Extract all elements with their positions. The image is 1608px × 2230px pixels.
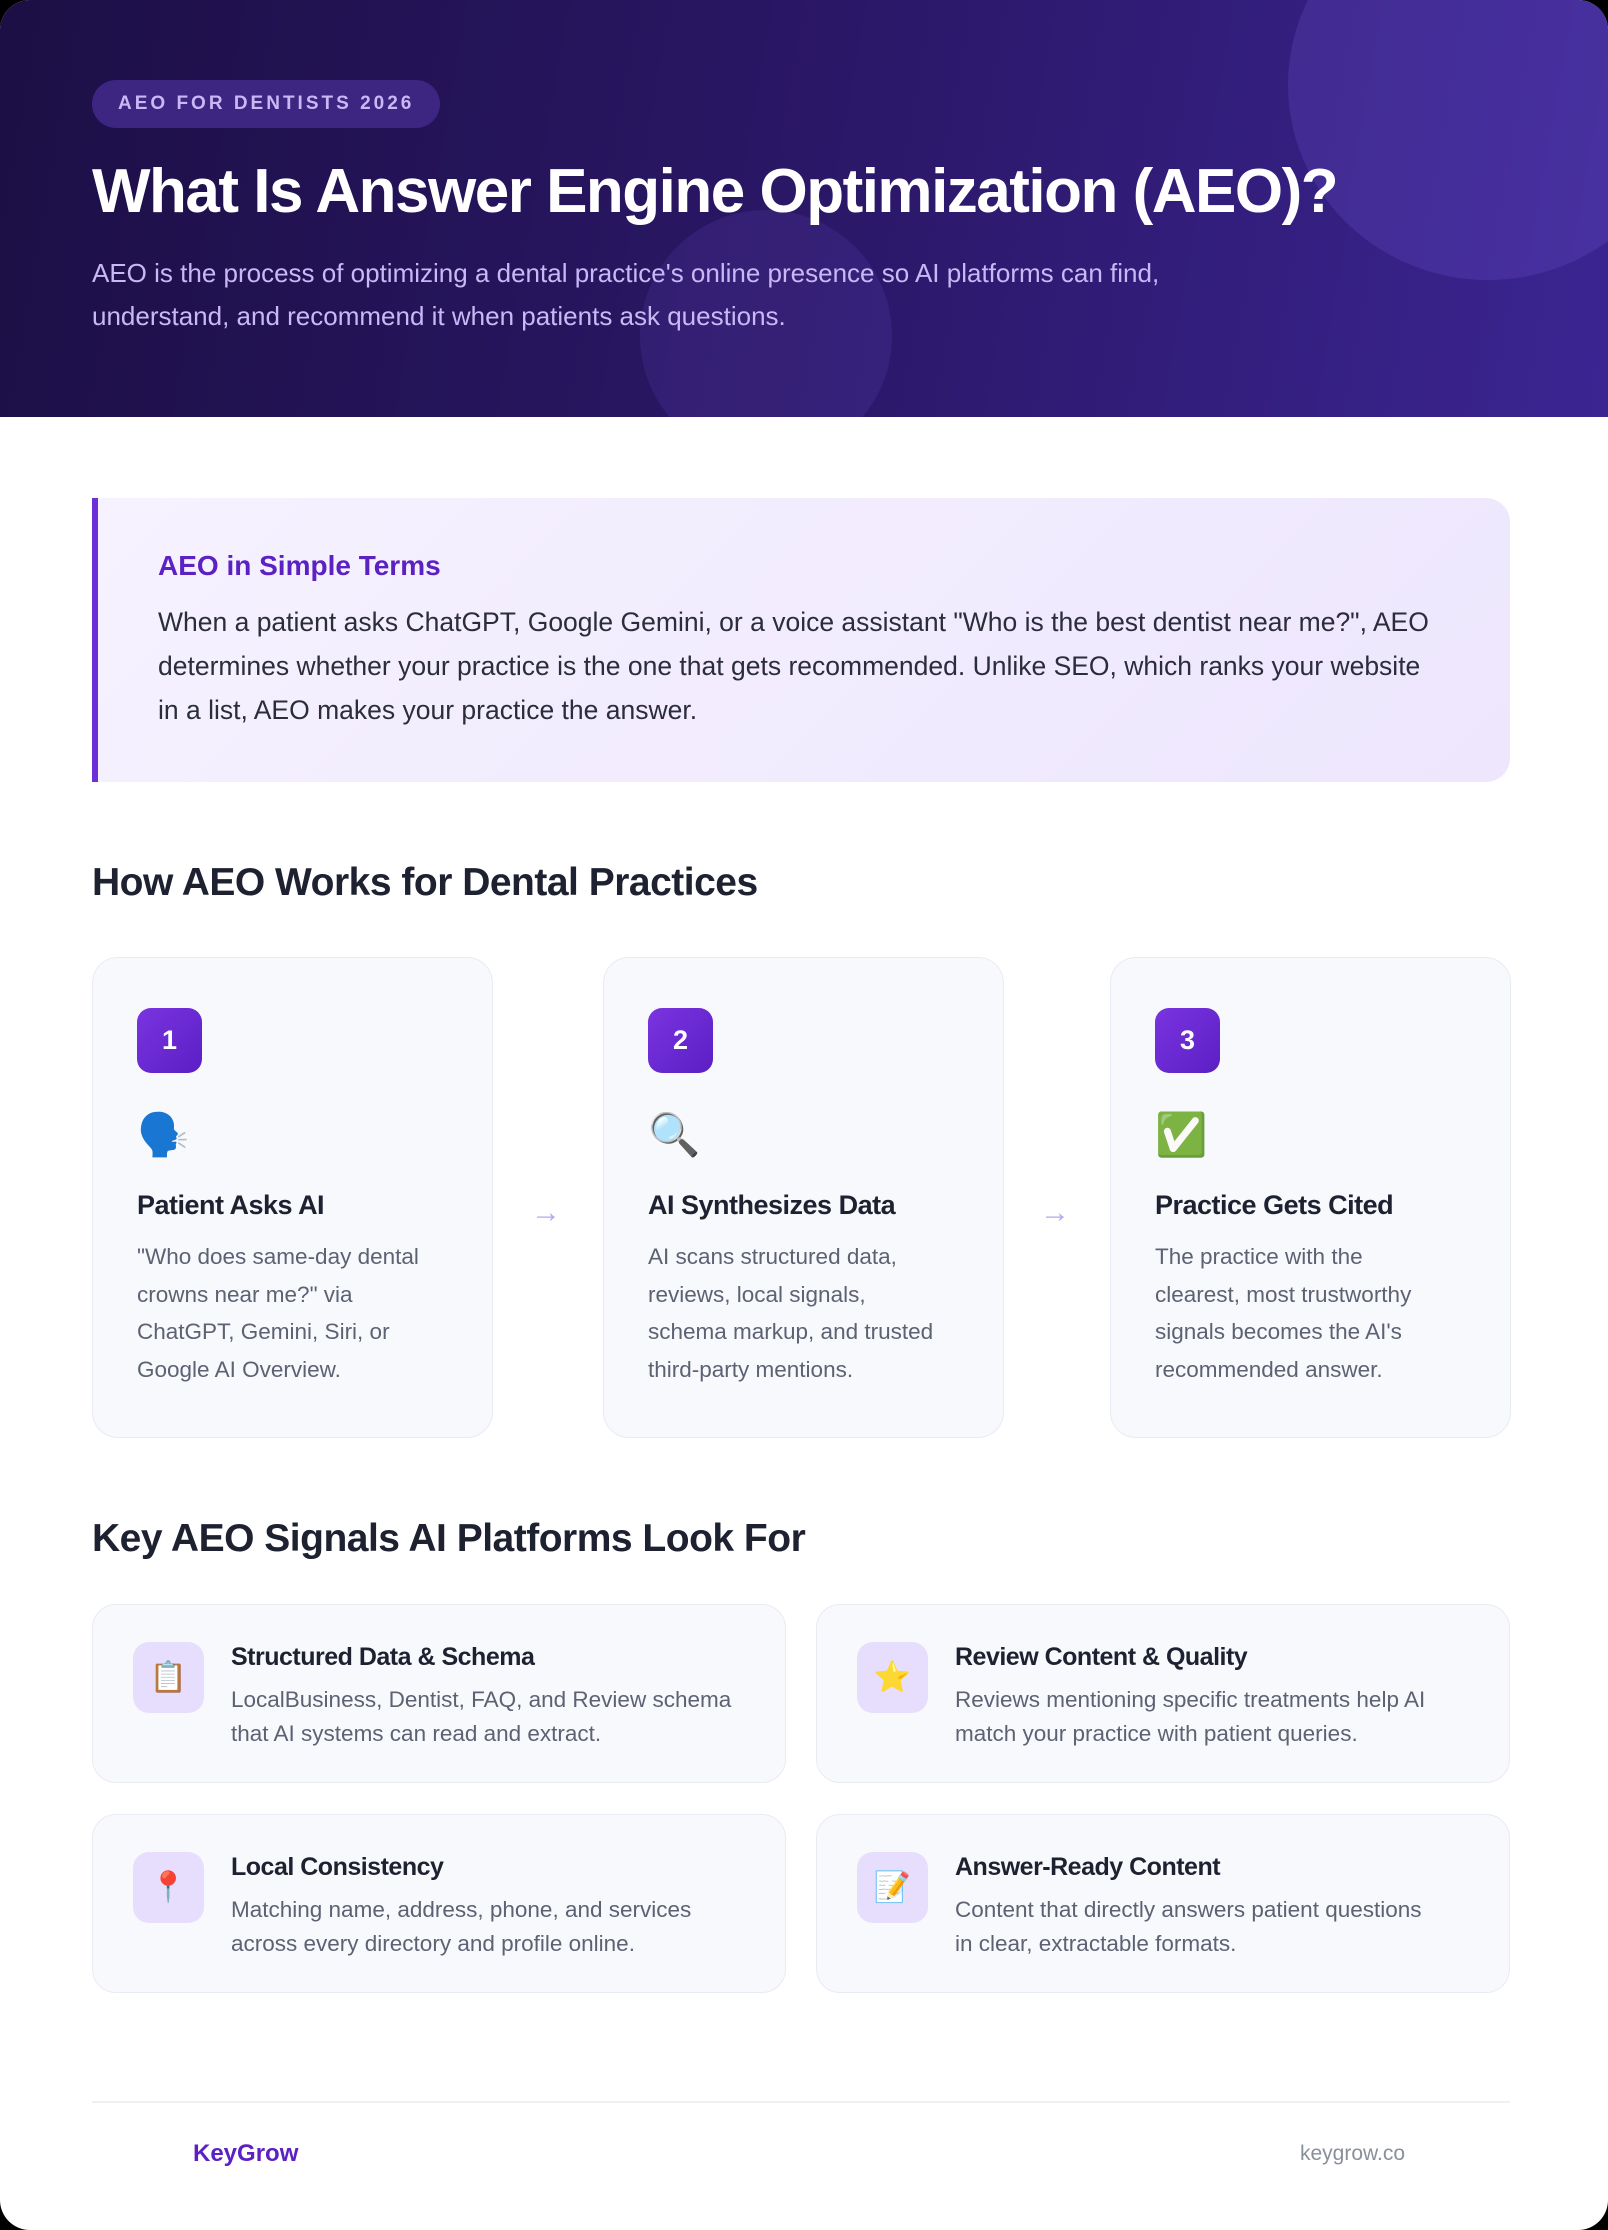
signal: answer-ready content: Answer-Ready Content (955, 1853, 1220, 1881)
signal: reviews: Review Content & Quality (955, 1643, 1247, 1671)
card: step 1: 🗣️ (137, 1111, 189, 1158)
signal: structured data: 📋 (150, 1661, 187, 1694)
pill tag: AEO FOR DENTISTS 2026 (118, 93, 414, 114)
signal: local consistency: 📍 (150, 1871, 187, 1904)
arrow 1: → (531, 1196, 561, 1229)
signal: answer-ready content: 📝 (874, 1871, 911, 1904)
card: step 2: 2 (673, 1025, 688, 1055)
signal: structured data: LocalBusiness, Dentist, FAQ, and Review schema that AI systems can read and extract. (231, 1687, 731, 1746)
signal: structured data: Structured Data & Schema (231, 1643, 534, 1671)
card: step 2: AI Synthesizes Data (648, 1190, 895, 1220)
callout: AEO in simple terms: When a patient asks ChatGPT, Google Gemini, or a voice assistant "Who is the best dentist near me?", AEO determines whether your practice is the one that gets recommended. Unlike SEO, which ranks your website in a list, AEO makes your practice the answer. (158, 607, 1429, 725)
footer url: keygrow.co (1300, 2142, 1405, 2165)
arrow 2: → (1040, 1196, 1070, 1229)
card: step 3: The practice with the clearest, most trustworthy signals becomes the AI's recommended answer. (1155, 1244, 1411, 1382)
card: step 1: "Who does same-day dental crowns near me?" via ChatGPT, Gemini, Siri, or Google AI Overview. (137, 1244, 419, 1382)
signal: structured data (92, 1604, 786, 1783)
card: step 1: Patient Asks AI (137, 1190, 324, 1220)
card: step 3: 3 (1180, 1025, 1195, 1055)
card: step 2: 🔍 (648, 1111, 700, 1158)
header banner (0, 0, 1608, 417)
card: step 1: 1 (162, 1025, 177, 1055)
heading: key signals: Key AEO Signals AI Platforms Look For (92, 1517, 805, 1560)
heading: how AEO works: How AEO Works for Dental Practices (92, 861, 758, 904)
card: step 3: Practice Gets Cited (1155, 1190, 1393, 1220)
callout: AEO in simple terms (92, 498, 1510, 782)
signal: answer-ready content (816, 1814, 1510, 1993)
signal: answer-ready content: Content that directly answers patient questions in clear, extractable formats. (955, 1897, 1422, 1956)
signal: reviews: Reviews mentioning specific treatments help AI match your practice with patient queries. (955, 1687, 1425, 1746)
signal: reviews (816, 1604, 1510, 1783)
card: step 3 (1110, 957, 1511, 1438)
footer brand: KeyGrow (193, 2140, 298, 2167)
card: step 2: AI scans structured data, reviews, local signals, schema markup, and trusted third-party mentions. (648, 1244, 933, 1382)
signal: reviews: ⭐ (874, 1661, 911, 1694)
signal: local consistency (92, 1814, 786, 1993)
card: step 2 (603, 957, 1004, 1438)
callout: AEO in simple terms: AEO in Simple Terms (158, 550, 441, 581)
title: What Is Answer Engine Optimization (AEO)? (92, 157, 1337, 226)
signal: local consistency: Local Consistency (231, 1853, 443, 1881)
card: step 1 (92, 957, 493, 1438)
signal: local consistency: Matching name, address, phone, and services across every directory and profile online. (231, 1897, 691, 1956)
subtitle: AEO is the process of optimizing a dental practice's online presence so AI platforms can find, understand, and recommend it when patients ask questions. (92, 258, 1159, 331)
pill tag (92, 80, 440, 128)
card: step 3: ✅ (1155, 1111, 1207, 1158)
